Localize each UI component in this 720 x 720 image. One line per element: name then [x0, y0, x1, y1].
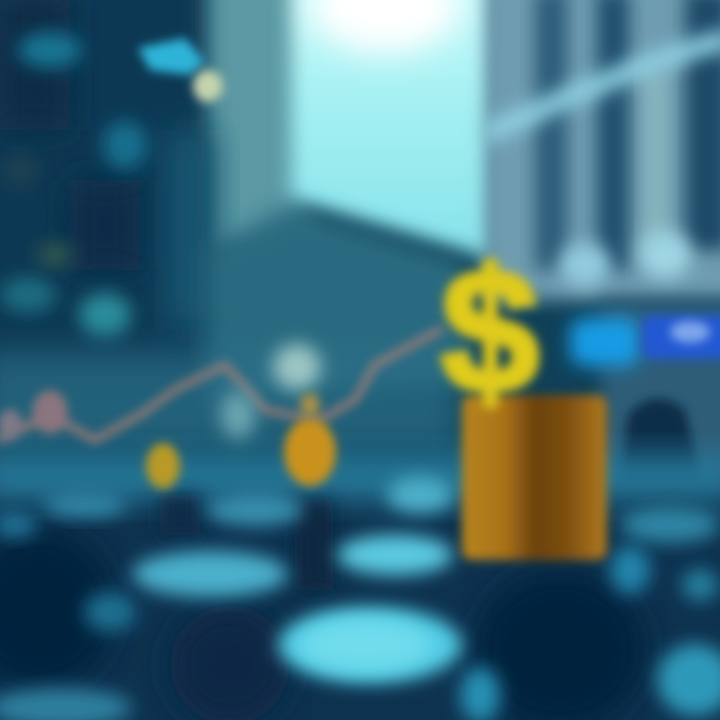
- mid street band: [0, 350, 460, 450]
- sign: blue panels: [570, 315, 720, 366]
- distant hill: [205, 205, 470, 400]
- small figures: [146, 344, 336, 489]
- right street dark area: [600, 300, 720, 490]
- trend line: [0, 330, 440, 441]
- dollar sign: $: [441, 234, 539, 430]
- coin stack: [462, 395, 607, 560]
- foreground dark cylinders: [0, 455, 720, 720]
- cylinder tops: glowing discs: [0, 477, 720, 720]
- middle distant tower: [195, 0, 305, 250]
- left dark buildings: [0, 0, 223, 390]
- right building with columns: [485, 0, 720, 300]
- dark figure: [620, 399, 702, 485]
- sky with sun: [290, 0, 495, 260]
